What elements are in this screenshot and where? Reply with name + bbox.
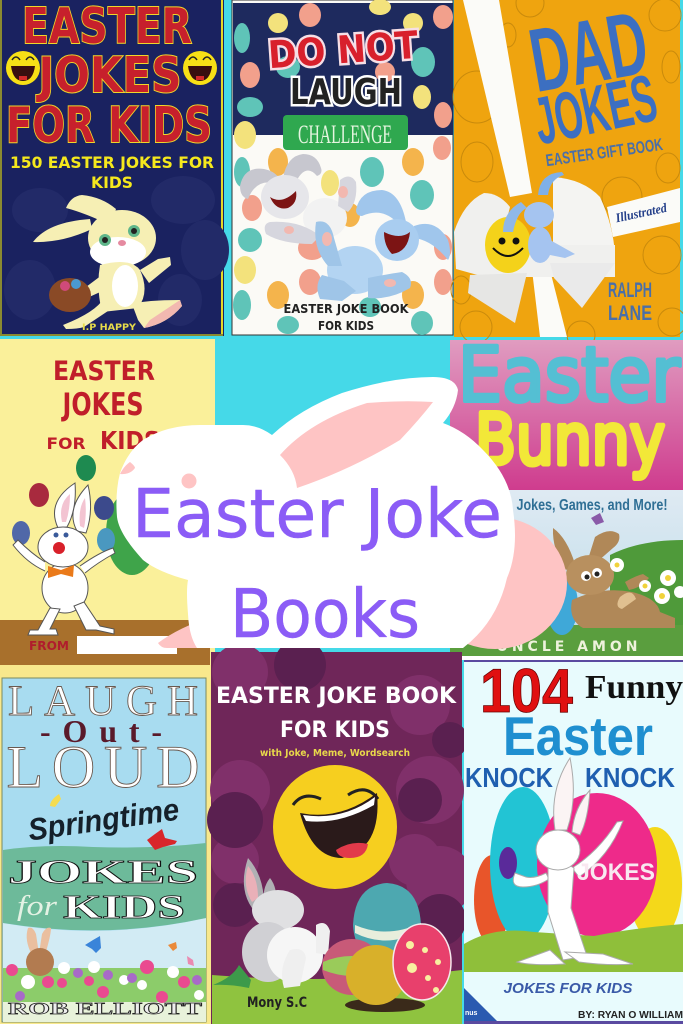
heading (46, 356, 160, 455)
heading: Dad Jokes (522, 0, 664, 170)
title badge: bunny silhouette (116, 377, 567, 653)
book cover: Dad Jokes (451, 0, 683, 349)
bunny nose (120, 462, 135, 474)
bunny body (116, 377, 515, 648)
heading (458, 330, 681, 481)
heading: EASTER JOKE BOOK (216, 684, 457, 709)
jokes for kids: JOKES (8, 854, 198, 891)
heading: Do Not Laugh: LAUGH (290, 72, 402, 113)
author: ROB ELLIOTT (8, 999, 203, 1018)
book cover: Easter Jokes for Kids, juggling bunny (0, 339, 215, 665)
heading: Do Not Laugh (267, 23, 420, 113)
bunny eye (182, 474, 196, 488)
book cover: Easter Joke Book for Kids, emoji (207, 639, 474, 1024)
heading: EASTER (53, 356, 155, 387)
author: BY: RYAN O WILLIAM (578, 1010, 683, 1021)
title: Easter Joke (132, 475, 502, 553)
caption: jokes for kids: JOKES FOR KIDS (504, 980, 632, 997)
heading: FOR (46, 434, 86, 453)
decorative emoji outline pattern (451, 0, 683, 349)
label: illustrated: Illustrated (613, 200, 669, 226)
illustration: grey bunny laughing (213, 858, 330, 988)
heading: LOUD (6, 734, 200, 800)
book cover: Easter Bunny (450, 330, 683, 660)
badge: challenge (283, 115, 408, 150)
bunny inner ear (280, 401, 433, 488)
subtitle: 150 EASTER JOKES FOR (10, 153, 214, 172)
book cover: Laugh Out Loud (0, 665, 211, 1024)
illustration: eggs and bunny (464, 758, 683, 972)
decorative egg pattern (233, 0, 453, 335)
bunny tail (423, 517, 567, 649)
bunny foot accent (158, 622, 197, 648)
label: jokes: JOKES (577, 859, 655, 886)
author: Mony S.C (247, 995, 307, 1011)
subtitle: with Joke, Meme, Wordsearch (260, 748, 410, 759)
illustration: laughing grey bunny (240, 154, 356, 244)
from label box (29, 636, 177, 654)
for label: for (17, 891, 57, 922)
bonus label: nus (465, 1010, 478, 1017)
caption: Easter Joke Book for Kids (284, 302, 409, 333)
illustration: brown bunny in grass (546, 513, 683, 635)
author: I.P HAPPY (82, 323, 136, 333)
subtitle: KIDS (91, 173, 133, 192)
heading: Easter Jokes for Kids: FOR KIDS (6, 97, 212, 154)
illustration: white ribbon bow with smiley egg and bunny (454, 172, 615, 323)
heading: LAUGH (8, 678, 198, 725)
heading: 104 (480, 657, 573, 726)
caption: Easter Joke Book for Kids: EASTER JOKE BOOK (284, 302, 409, 316)
illustration: juggling bunny and eggs (12, 455, 158, 635)
book cover: Easter Jokes for Kids (0, 0, 229, 336)
book cover: 104 Funny Easter Knock Knock (464, 657, 683, 1024)
heading (216, 684, 457, 743)
jokes for kids: KIDS (63, 889, 185, 926)
badge: challenge: CHALLENGE (298, 120, 392, 149)
decorative scallops (207, 639, 474, 946)
title: Books (230, 575, 420, 653)
illustration: running bunny (33, 195, 182, 329)
heading (465, 657, 683, 793)
illustration: decorated eggs (322, 883, 451, 1012)
illustration: bunny, butterflies and flowers (6, 794, 204, 1003)
heading: Funny (585, 669, 683, 706)
heading: JOKES (61, 387, 144, 423)
heading: KIDS (100, 426, 160, 455)
author: Ralph Lane: LANE (608, 302, 652, 325)
heading: FOR KIDS (280, 718, 390, 743)
springtime: Springtime (26, 792, 181, 848)
icon: laughing emoji left (6, 51, 40, 85)
author: Ralph Lane (608, 279, 652, 325)
heading: Easter Jokes for Kids (6, 0, 212, 154)
from label box: FROM (29, 639, 69, 653)
caption: Easter Joke Book for Kids: FOR KIDS (318, 319, 374, 333)
book cover: Do Not Laugh Challenge (232, 0, 453, 335)
out label: -Out- (40, 713, 162, 749)
heading: KNOCK (465, 762, 553, 793)
author: UNCLE AMON (496, 639, 638, 655)
title (132, 475, 502, 653)
heading: Easter Jokes for Kids: JOKES (36, 47, 182, 104)
icon: laughing emoji (273, 765, 397, 889)
jokes for kids (8, 854, 198, 926)
heading: Easter (503, 705, 653, 767)
author: Ralph Lane: RALPH (608, 279, 652, 302)
subtitle (10, 153, 214, 192)
white ribbon (463, 0, 680, 337)
heading (6, 678, 200, 800)
heading: Do Not Laugh: DO NOT (267, 23, 420, 77)
illustration: laughing blue bunny (315, 190, 450, 301)
icon: laughing emoji right (183, 51, 217, 85)
